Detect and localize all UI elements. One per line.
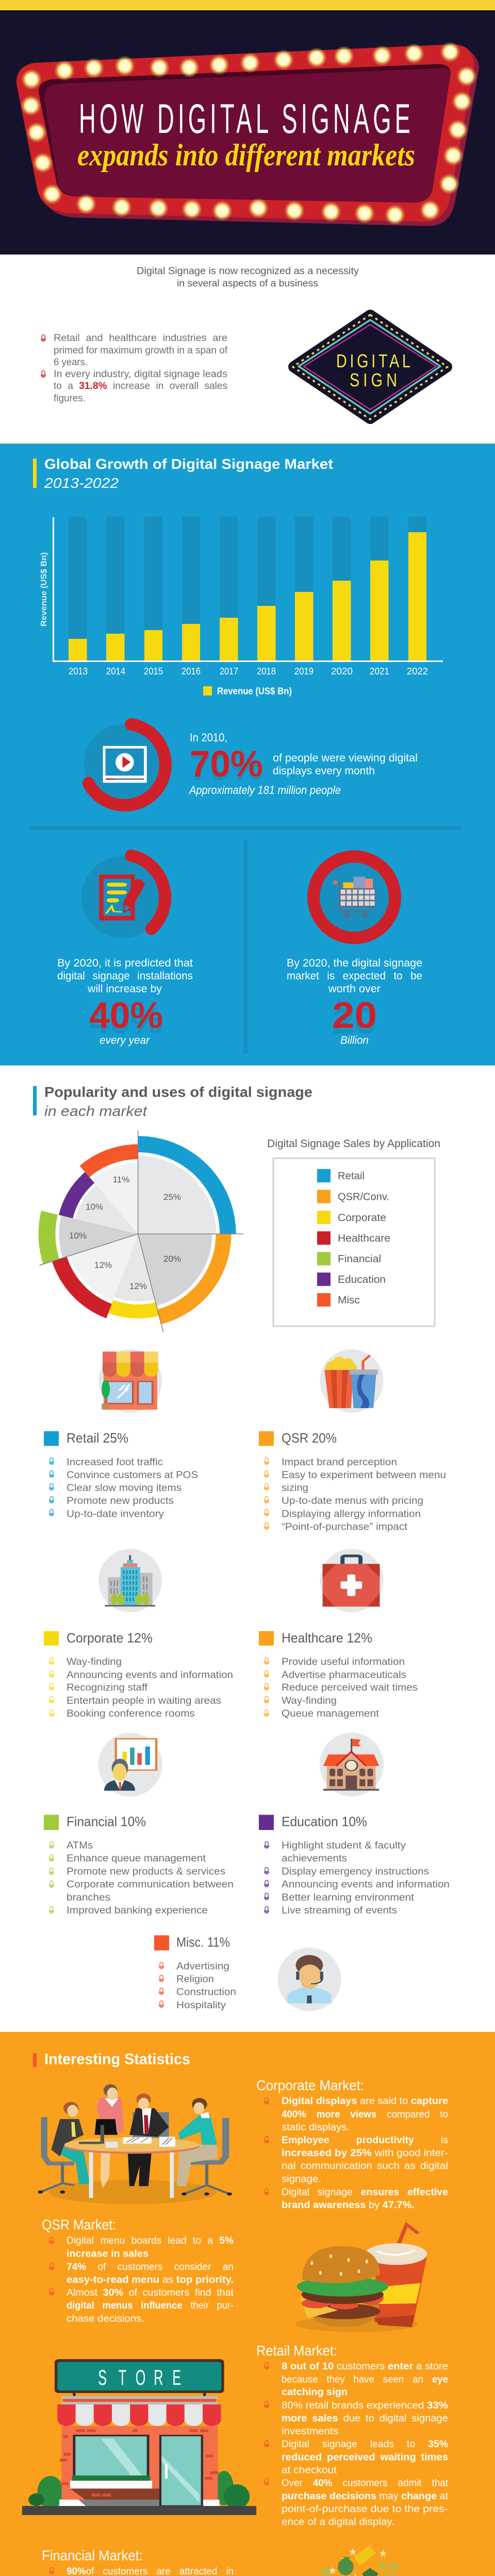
stats: corporate market: signage.: [282, 2174, 321, 2184]
pie chart: 10%: [86, 1202, 103, 1212]
stats: QSR market: QSR Market:: [42, 2216, 116, 2232]
icon: neon digital sign: DIGITAL: [336, 350, 410, 371]
stats: QSR market: easy-to-read menu as top priority.: [67, 2275, 234, 2285]
misc bullet list: [159, 1961, 236, 2011]
stats: retail market: [256, 2343, 449, 2528]
stat: 40 percent: 40%: [89, 1001, 163, 1042]
stats: QSR market: digital menus influence their pur-: [67, 2300, 234, 2311]
panel: QSR: [259, 1430, 446, 1532]
stat: 40 percent: By 2020, it is predicted that: [57, 957, 193, 969]
bar chart: 2016: [182, 666, 201, 676]
retail bullet list: Promote new products: [67, 1496, 174, 1506]
icon: popcorn and drink: [320, 1349, 384, 1413]
panel: education: Education 10%: [282, 1814, 367, 1829]
misc bullet list: Advertising: [176, 1961, 229, 1972]
panel: corporate: Corporate 12%: [67, 1630, 153, 1646]
education bullet list: Live streaming of events: [282, 1905, 397, 1916]
panel: healthcare: Healthcare 12%: [282, 1630, 372, 1646]
intro bullet list: to a 31.8% increase in overall sales: [54, 381, 227, 392]
heading: Interesting Statistics: [44, 2051, 190, 2068]
stats: corporate market: Digital displays are said to capture: [282, 2096, 448, 2107]
legend box: Misc: [338, 1295, 360, 1306]
misc bullet list: Religion: [176, 1974, 214, 1985]
stat: 70 percent: displays every month: [273, 765, 375, 777]
stats: retail market: 8 out of 10 customers enter a store: [282, 2361, 448, 2372]
panel: healthcare: [259, 1630, 418, 1719]
intro bullet list: [41, 333, 228, 404]
illustration: store front: [22, 2359, 256, 2515]
stat: 70 percent: [188, 731, 418, 796]
subheading: 2013-2022: [44, 475, 119, 491]
panel: misc: Misc. 11%: [176, 1935, 230, 1950]
icon: neon digital sign: SIGN: [350, 369, 397, 391]
bar chart: 2020: [331, 666, 353, 676]
person: man in suit: [128, 2153, 152, 2186]
stats: QSR market: [42, 2216, 234, 2325]
top yellow bar: [0, 0, 495, 10]
intro text: Digital Signage is now recognized as a necessity: [137, 266, 359, 277]
bar chart: 2019: [294, 666, 314, 676]
financial bullet list: branches: [67, 1892, 110, 1903]
heading: Global Growth of Digital Signage Market: [44, 456, 333, 472]
stats: QSR market: Digital menu boards lead to a 5%: [67, 2235, 234, 2246]
person: woman seated: [57, 2145, 90, 2184]
QSR bullet list: Easy to experiment between menu: [282, 1470, 446, 1481]
stat: 20 billion: 20: [332, 995, 377, 1036]
financial bullet list: Corporate communication between: [67, 1879, 234, 1890]
stats: retail market: purchase decisions may change at: [282, 2491, 449, 2502]
retail bullet list: [50, 1457, 198, 1520]
stats: QSR market: chase decisions.: [67, 2313, 144, 2325]
illustration: burger and drink: [295, 2225, 427, 2332]
chart legend: Revenue (US$ Bn): [217, 686, 292, 697]
icon: shopping cart ring: [314, 856, 395, 938]
legend box: Education: [338, 1274, 386, 1285]
bar chart: 2013: [69, 666, 88, 676]
legend box: Retail: [338, 1171, 365, 1182]
heading marker: [33, 2053, 37, 2067]
panel: retail: Retail 25%: [67, 1430, 128, 1446]
education bullet list: Announcing events and information: [282, 1879, 450, 1890]
stats: corporate market: brand awareness by 47.7%.: [282, 2200, 415, 2211]
person: woman standing: [101, 2150, 110, 2188]
pie chart: 12%: [129, 1281, 147, 1291]
corporate bullet list: Announcing events and information: [67, 1670, 233, 1681]
financial bullet list: Enhance queue management: [67, 1853, 206, 1864]
bar chart: 2017: [220, 666, 238, 676]
stats: retail market: Digital signage leads to 35%: [282, 2439, 448, 2450]
stat: 40 percent: will increase by: [87, 983, 162, 995]
bar chart: 2014: [106, 666, 125, 676]
stats: corporate market: 400% more views compared to: [282, 2109, 448, 2120]
stat: 40 percent: [57, 957, 193, 1046]
healthcare bullet list: Reduce perceived wait times: [282, 1683, 418, 1693]
panel: corporate: [44, 1630, 233, 1719]
bar chart: 2021: [370, 666, 389, 676]
stats: retail market: catching sign: [282, 2387, 348, 2398]
corporate bullet list: Booking conference rooms: [67, 1708, 195, 1719]
icon: clipboard ring 40%: [81, 856, 165, 938]
stats: corporate market: [256, 2077, 448, 2211]
legend box: Corporate: [338, 1212, 386, 1224]
pie chart: 10%: [69, 1231, 87, 1241]
retail bullet list: Up-to-date inventory: [67, 1509, 164, 1520]
table: [89, 2150, 93, 2198]
stats: retail market: 80% retail brands experienced 33%: [282, 2400, 448, 2411]
legend box: Healthcare: [338, 1233, 390, 1244]
heading: popularity: [44, 1084, 312, 1119]
heading: popularity: Popularity and uses of digital signage: [44, 1084, 312, 1100]
bar chart: 2018: [257, 666, 276, 676]
misc bullet list: Construction: [176, 1987, 236, 1998]
intro bullet list: In every industry, digital signage leads: [54, 369, 227, 380]
icon: support agent: [277, 1947, 341, 2011]
financial bullet list: Improved banking experience: [67, 1905, 208, 1916]
stat: 40 percent: digital signage installations: [57, 970, 193, 982]
QSR bullet list: Displaying allergy information: [282, 1509, 421, 1520]
corporate bullet list: Way-finding: [67, 1657, 122, 1667]
icon: neon digital sign: [293, 315, 448, 419]
intro text: in several aspects of a business: [177, 278, 318, 289]
person: man seated: [177, 2145, 217, 2186]
healthcare bullet list: Provide useful information: [282, 1657, 405, 1667]
subtitle: expands into different markets: [77, 138, 415, 172]
stats: retail market: investments: [282, 2426, 338, 2437]
pie chart: 12%: [94, 1260, 112, 1270]
financial bullet list: [50, 1840, 234, 1916]
icon: corporate building: [98, 1549, 162, 1613]
stats: retail market: Retail Market:: [256, 2343, 337, 2359]
panel: financial: [44, 1814, 234, 1916]
chairs: [44, 2117, 74, 2163]
pie chart: 20%: [163, 1254, 181, 1264]
QSR bullet list: “Point-of-purchase” impact: [282, 1522, 408, 1532]
hero panel: [0, 10, 495, 255]
QSR bullet list: [265, 1457, 446, 1532]
panel: retail: [44, 1430, 198, 1520]
stats: retail market: reduced perceived waiting times: [282, 2452, 448, 2463]
QSR bullet list: Up-to-date menus with pricing: [282, 1496, 423, 1506]
stats: QSR market: Almost 30% of customers find that: [67, 2287, 234, 2298]
stats: retail market: more sales due to digital signage: [282, 2413, 448, 2424]
stat: 20 billion: [287, 957, 422, 1046]
intro bullet list: primed for maximum growth in a span of: [54, 345, 228, 356]
stats: corporate market: nal communication such as digital: [282, 2161, 448, 2172]
stat: 70 percent: Approximately 181 million people: [188, 784, 341, 796]
healthcare bullet list: Way-finding: [282, 1696, 337, 1706]
illustration: meeting: [38, 2084, 232, 2204]
panel: interesting statistics: [0, 2032, 495, 2576]
icon: medical kit: [320, 1549, 384, 1613]
stats: retail market: because they have seen an eye: [282, 2374, 448, 2385]
icon: presenter with chart: [98, 1733, 162, 1797]
legend title: Digital Signage Sales by Application: [267, 1138, 440, 1150]
corporate bullet list: Entertain people in waiting areas: [67, 1696, 221, 1706]
education bullet list: achievements: [282, 1853, 347, 1864]
retail bullet list: Increased foot traffic: [67, 1457, 163, 1468]
education bullet list: [265, 1840, 450, 1916]
heading marker: popularity: [33, 1086, 37, 1115]
stat: 70 percent: 70%: [190, 748, 263, 788]
legend box: Financial: [338, 1253, 381, 1265]
retail bullet list: Convince customers at POS: [67, 1470, 198, 1481]
stats: retail market: at checkout: [282, 2465, 337, 2476]
stats: corporate market: Corporate Market:: [256, 2077, 364, 2093]
education bullet list: Highlight student & faculty: [282, 1840, 406, 1851]
healthcare bullet list: [265, 1657, 418, 1719]
stat: 20 billion: Billion: [340, 1035, 369, 1046]
intro bullet list: Retail and healthcare industries are: [54, 333, 227, 344]
financial bullet list: ATMs: [67, 1840, 93, 1851]
bar chart: 2015: [144, 666, 163, 676]
heading: popularity: in each market: [44, 1103, 147, 1119]
bar chart: [40, 517, 443, 697]
bar chart: 2022: [407, 666, 428, 676]
marquee bulbs: [21, 42, 477, 225]
stats: financial market: [42, 2547, 234, 2576]
healthcare bullet list: Queue management: [282, 1708, 380, 1719]
retail bullet list: Clear slow moving items: [67, 1483, 182, 1494]
stats: corporate market: Digital signage ensures effective: [282, 2187, 448, 2198]
stats: QSR market: increase in sales: [67, 2249, 148, 2260]
stat: 20 billion: worth over: [328, 983, 381, 995]
panel: misc: [154, 1935, 236, 2011]
panel: QSR: QSR 20%: [282, 1430, 337, 1446]
panel: global growth: [0, 444, 495, 1065]
pie chart: [39, 1130, 243, 1332]
QSR bullet list: Impact brand perception: [282, 1457, 397, 1468]
intro text: [137, 266, 359, 289]
stat: 20 billion: 20: [332, 1001, 377, 1042]
heading marker: [33, 459, 37, 488]
corporate bullet list: Recognizing staff: [67, 1683, 148, 1693]
stats: retail market: point-of-purchase due to the pres-: [282, 2504, 448, 2515]
icon: retail store: [98, 1349, 162, 1413]
store sign text: STORE: [98, 2366, 181, 2390]
stats: retail market: ence of a digital display.: [282, 2517, 394, 2528]
pie chart: 25%: [163, 1192, 181, 1202]
stat: 40 percent: 40%: [89, 995, 163, 1036]
title: HOW DIGITAL SIGNAGE: [79, 95, 410, 142]
intro bullet list: 6 years.: [54, 357, 88, 368]
education bullet list: Better learning environment: [282, 1892, 415, 1903]
marquee sign: [16, 42, 479, 226]
legend box: QSR/Conv.: [338, 1191, 389, 1202]
healthcare bullet list: Advertise pharmaceuticals: [282, 1670, 406, 1681]
stats: retail market: Over 40% customers admit that: [282, 2478, 449, 2489]
icon: school building: [320, 1733, 384, 1797]
stat: 70 percent: In 2010,: [190, 731, 227, 744]
stat: 20 billion: By 2020, the digital signage: [287, 957, 422, 969]
stat: 40 percent: every year: [100, 1035, 150, 1046]
stats: corporate market: increased by 25% with good inter-: [282, 2148, 448, 2159]
stat: 70 percent: of people were viewing digital: [273, 752, 418, 764]
stats: QSR market: 74% of customers consider an: [67, 2262, 234, 2273]
stats: corporate market: Employee productivity is: [282, 2135, 448, 2146]
pie chart: 11%: [113, 1175, 129, 1184]
stat: 70 percent: 70%: [190, 744, 263, 785]
financial bullet list: Promote new products & services: [67, 1867, 225, 1877]
legend box: [273, 1158, 435, 1326]
misc bullet list: Hospitality: [176, 2000, 226, 2011]
intro bullet list: figures.: [54, 393, 86, 404]
education bullet list: Display emergency instructions: [282, 1867, 429, 1877]
QSR bullet list: sizing: [282, 1483, 308, 1494]
illustration: money briefcase: [307, 2545, 416, 2576]
stats: corporate market: static displays.: [282, 2122, 350, 2133]
stat: 20 billion: market is expected to be: [287, 970, 422, 982]
corporate bullet list: [50, 1657, 233, 1719]
stats: financial market: Financial Market:: [42, 2547, 143, 2563]
panel: financial: Financial 10%: [67, 1814, 146, 1829]
bar chart: Revenue (US$ Bn): [40, 552, 48, 626]
icon: video ring 70%: [84, 724, 166, 805]
panel: education: [259, 1814, 450, 1916]
